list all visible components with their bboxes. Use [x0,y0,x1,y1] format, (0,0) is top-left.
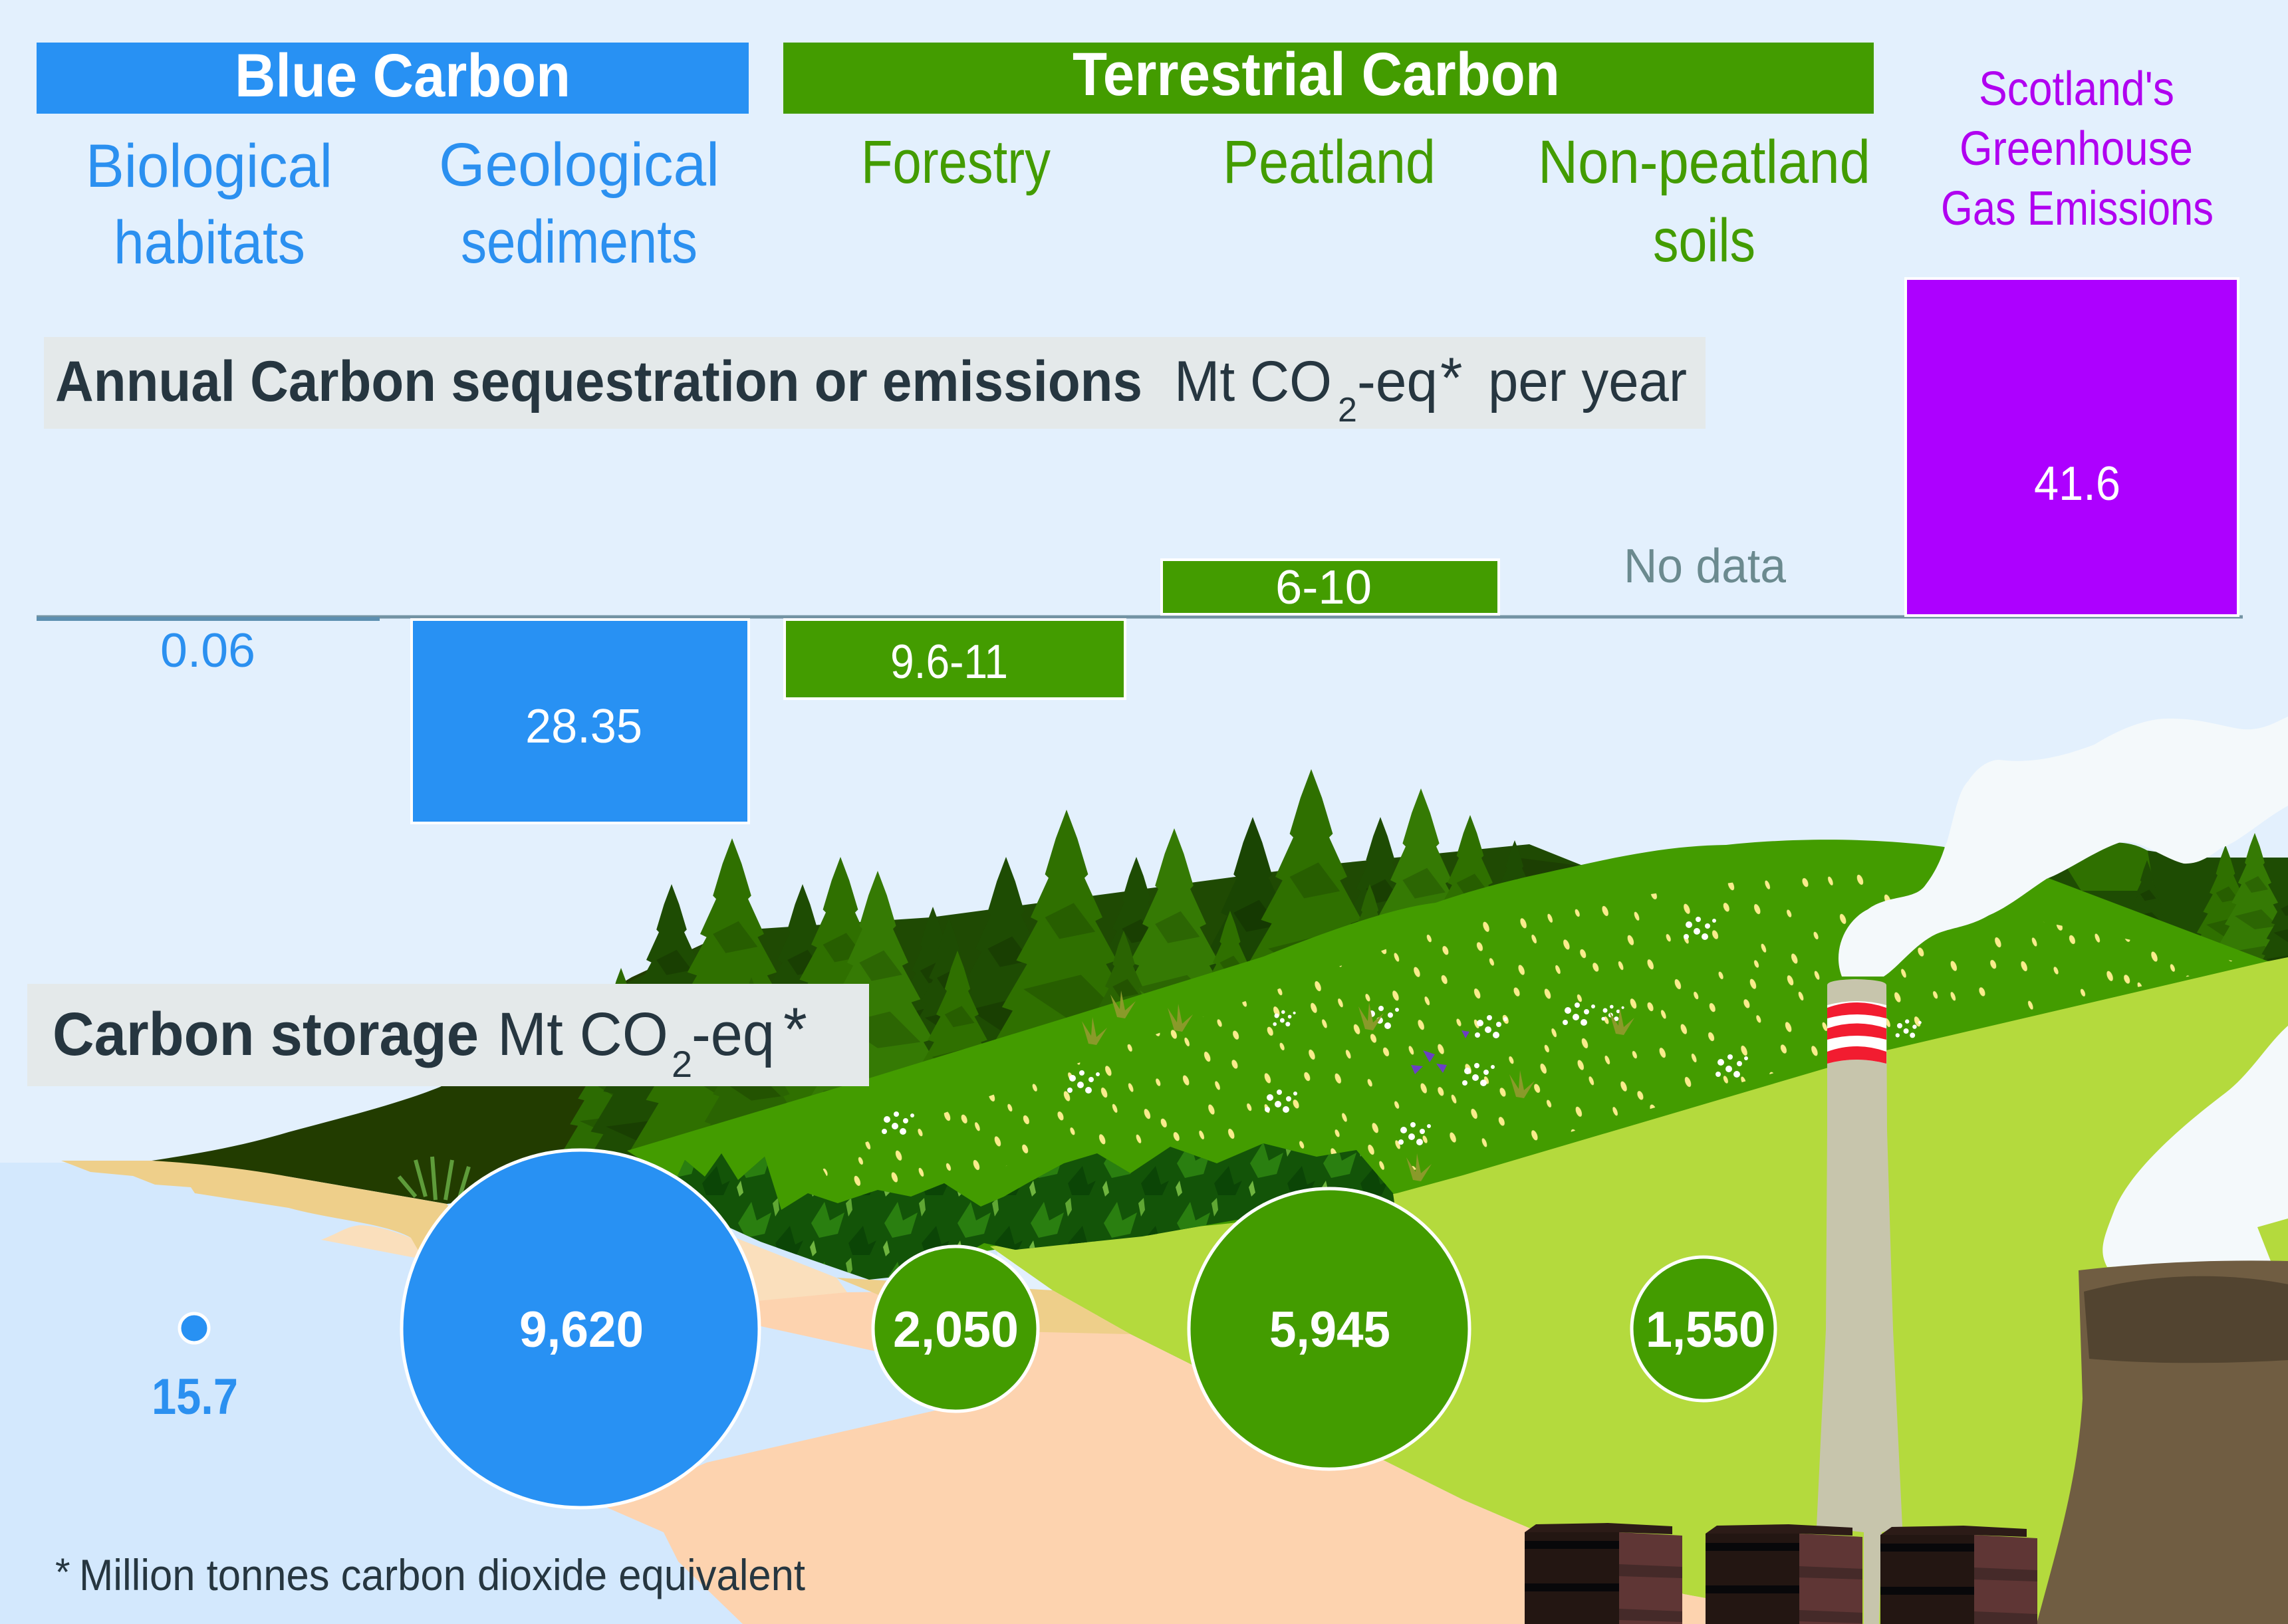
oil tank 2 [1706,1524,1862,1624]
column label: Forestry: Forestry [861,128,1051,196]
panel: annual carbon heading: Mt CO [1174,350,1332,413]
chimney smoke [1839,717,2288,977]
panel: carbon storage heading: Mt CO [497,1000,668,1068]
bar: biological habitats 0.06 [37,617,380,677]
bar: peatland 6-10 [1162,560,1499,614]
dark hillside [152,931,931,1204]
panel: annual carbon heading: 2 [1338,391,1357,429]
bubble: forestry storage 2,050: 2,050 [893,1302,1019,1358]
bar: forestry 9.6-11: 9.6-11 [890,636,1008,689]
column label: Scotland's Greenhouse Gas Emissions: Gas Emissions [1941,182,2214,235]
footnote: * [55,1551,70,1594]
bar: emissions 41.6: 41.6 [2034,457,2120,511]
cooling tower [2037,1260,2288,1624]
bar: emissions 41.6 [1906,279,2238,616]
panel: annual carbon heading: -eq [1357,350,1438,413]
bar: geological sediments 28.35: 28.35 [525,700,642,753]
meadow hill [627,840,2288,1273]
bar: forestry 9.6-11 [785,620,1125,699]
column label: Geological sediments [439,131,719,276]
column label: Scotland's Greenhouse Gas Emissions: Greenhouse [1960,122,2193,175]
bubble: geological sediments storage 9,620 [402,1150,759,1508]
grass tufts [1082,990,1634,1181]
oil tank 3 [1880,1526,2037,1624]
bubble: peatland storage 5,945 [1189,1189,1469,1469]
shrubs [668,1143,1396,1280]
peach beach [606,1243,1848,1624]
far forest right [2035,833,2288,1027]
column label: Biological habitats: habitats [114,209,305,277]
bar: peatland 6-10: 6-10 [1275,561,1372,614]
bubble: peatland storage 5,945: 5,945 [1269,1302,1390,1358]
footnote: Million tonnes carbon dioxide equivalent [79,1550,805,1599]
panel: carbon storage heading: * [783,996,807,1064]
panel: annual carbon heading: * [1440,346,1462,410]
bar: biological habitats 0.06: 0.06 [160,624,255,677]
bubble: non-peatland soils storage 1,550: 1,550 [1646,1302,1765,1358]
oil tank 1 [1525,1523,1682,1624]
grass tuft on dark hill [399,1157,469,1200]
column label: Biological habitats [86,132,332,277]
column label: Peatland: Peatland [1223,128,1436,196]
header: Blue Carbon: Blue Carbon [235,42,571,110]
panel: carbon storage heading: Carbon storage [53,1000,479,1068]
meadow flowers [818,864,2247,1197]
column label: Scotland's Greenhouse Gas Emissions: Scotland's [1979,62,2174,116]
pale sand [321,1225,847,1301]
bubble: biological habitats storage 15.7: 15.7 [152,1369,238,1425]
header: Blue Carbon [37,42,749,114]
cooling tower smoke [2102,1026,2288,1267]
bubble: biological habitats storage 15.7 [152,1314,238,1425]
column label: Scotland's Greenhouse Gas Emissions [1941,62,2214,235]
column label: Non-peatland soils [1538,128,1870,275]
header: Terrestrial Carbon: Terrestrial Carbon [1073,41,1560,108]
column label: Non-peatland soils: soils [1653,207,1755,275]
panel: carbon storage heading: 2 [672,1043,692,1085]
panel: annual carbon heading [44,337,1706,429]
header: Terrestrial Carbon [783,41,1874,114]
bar chart: annual sequestration and emissions [37,279,2243,823]
bubble: geological sediments storage 9,620: 9,620 [519,1302,644,1358]
label: no data: No data [1624,540,1787,593]
column label: Biological habitats: Biological [86,132,332,200]
panel: carbon storage heading: -eq [692,1000,775,1068]
panel: annual carbon heading: per year [1488,350,1687,413]
panel: carbon storage heading [27,984,869,1086]
water [0,1163,997,1624]
column label: Geological sediments: sediments [461,208,698,276]
bubble: forestry storage 2,050 [873,1246,1038,1411]
forest [564,769,1583,1220]
landscape illustration [0,717,2288,1624]
bar: geological sediments 28.35 [412,620,749,823]
chimney [1817,979,1902,1624]
column label: Non-peatland soils: Non-peatland [1538,128,1870,196]
column label: Geological sediments: Geological [439,131,719,199]
panel: annual carbon heading: Annual Carbon sequestration or emissions [55,350,1142,413]
axis line [37,616,2243,618]
tan sand [61,1161,1130,1334]
lime hill [990,957,2288,1624]
bubble: non-peatland soils storage 1,550 [1632,1257,1775,1401]
